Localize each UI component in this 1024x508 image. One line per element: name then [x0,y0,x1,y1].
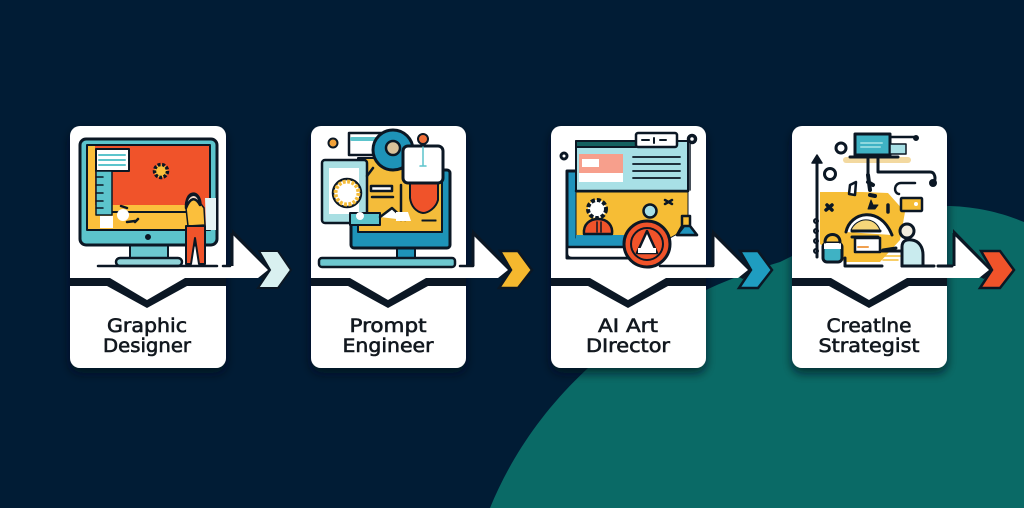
label: AI Art Director [586,316,670,357]
label: AI Art Director: DIrector [586,336,670,357]
card 3 shape [551,126,706,368]
label: Prompt Engineer: Engineer [342,336,434,357]
label: Creative Strategist: Creatlne [826,316,912,337]
label: Graphic Designer [103,316,191,357]
card 4 shape [792,126,947,368]
icon: art director window [561,133,713,267]
background teal curve [490,206,1024,508]
label: Creative Strategist [818,316,920,357]
label: Graphic Designer: Graphic [107,316,187,337]
arrow 4 [792,229,1014,308]
card 4: Creative Strategist [792,126,1014,368]
icon: strategist with flow diagram [812,134,952,266]
card 1: Graphic Designer [70,126,291,368]
label: AI Art Director: AI Art [598,316,658,337]
card 2: Prompt Engineer [311,126,532,368]
card 2 shape [311,126,466,368]
arrow 1 [70,229,291,308]
label: Graphic Designer: Designer [103,336,191,357]
label: Prompt Engineer [342,316,434,357]
icon: AI prompt monitor [319,130,473,267]
icon: designer at monitor [80,139,230,266]
arrow 2 [311,229,532,308]
label: Creative Strategist: Strategist [818,336,920,357]
arrow 3 [551,229,772,308]
card 1 shape [70,126,226,368]
card 3: AI Art Director [551,126,772,368]
label: Prompt Engineer: Prompt [350,316,426,337]
